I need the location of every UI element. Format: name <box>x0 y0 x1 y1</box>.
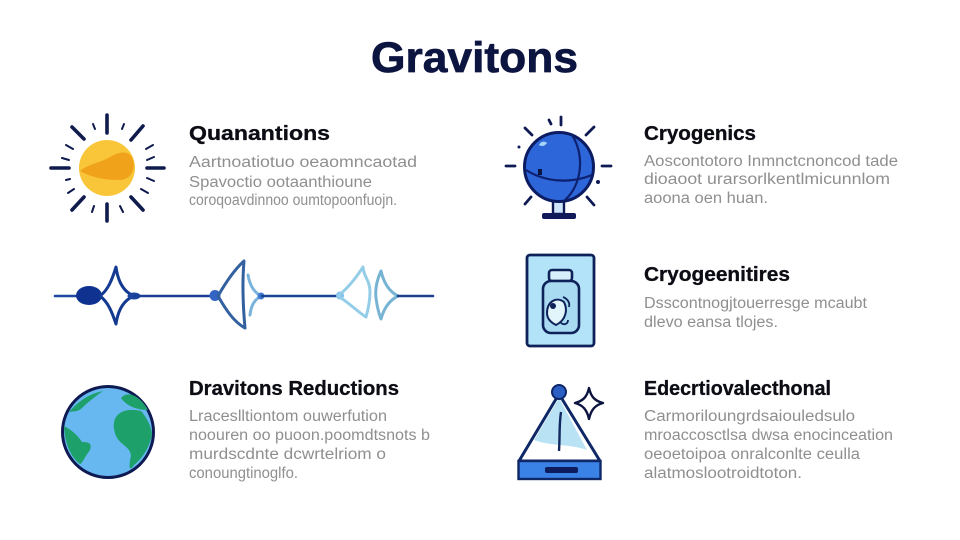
icon: pyramid detector <box>518 385 603 479</box>
text block: third left description: murdscdnte dcwrtelriom o <box>189 446 386 463</box>
text block: third left description <box>189 408 430 482</box>
text block: third left description: noouren oo puoon.poomdtsnots b <box>189 427 430 444</box>
text block: first right description <box>644 153 898 207</box>
icon: cryogenic bottle <box>527 255 594 346</box>
text block: second right description: Dsscontnogjtouerresge mcaubt <box>644 295 868 312</box>
text block: third left description: Lraceslltiontom ouwerfution <box>189 408 387 425</box>
text block: third right description: alatmoslootroidtoton. <box>644 465 802 482</box>
text block: first right description: aoona oen huan. <box>644 190 768 207</box>
heading: Cryogenics: Cryogenics <box>644 123 756 145</box>
heading: Edecrtiovalecthonal: Edecrtiovalecthonal <box>644 378 831 400</box>
text block: second right description: dlevo eansa tlojes. <box>644 314 778 331</box>
icon: graviton waveform <box>55 261 433 328</box>
icon: earth globe <box>62 386 154 478</box>
text block: first right description: dioaoot urarsorlkentlmicunnlom <box>644 171 890 188</box>
text block: first left description: coroqoavdinnoo oumtopoonfuojn. <box>189 192 397 209</box>
text block: first left description <box>189 154 417 209</box>
heading: Dravitons Reductions: Dravitons Reductions <box>189 378 399 400</box>
text block: first right description: Aoscontotoro Inmnctcnoncod tade <box>644 153 898 170</box>
title: Gravitons <box>371 34 578 82</box>
text block: third right description: mroaccosctlsa dwsa enocinceation <box>644 427 893 444</box>
text block: first left description: Aartnoatiotuo oeaomncaotad <box>189 154 417 171</box>
text block: third right description: Carmoriloungrdsaiouledsulo <box>644 408 855 425</box>
text block: second right description <box>644 295 868 331</box>
text block: third right description <box>644 408 893 482</box>
heading: Quanantions: Quanantions <box>189 123 330 145</box>
icon: cryogenic sphere <box>506 117 611 219</box>
text block: first left description: Spavoctio ootaanthioune <box>189 174 372 191</box>
text block: third left description: conoungtinoglfo. <box>189 465 298 482</box>
icon: sun <box>51 115 164 221</box>
text block: third right description: oeoetoipoa onralconlte ceulla <box>644 446 860 463</box>
heading: Cryogeenitires: Cryogeenitires <box>644 264 790 286</box>
